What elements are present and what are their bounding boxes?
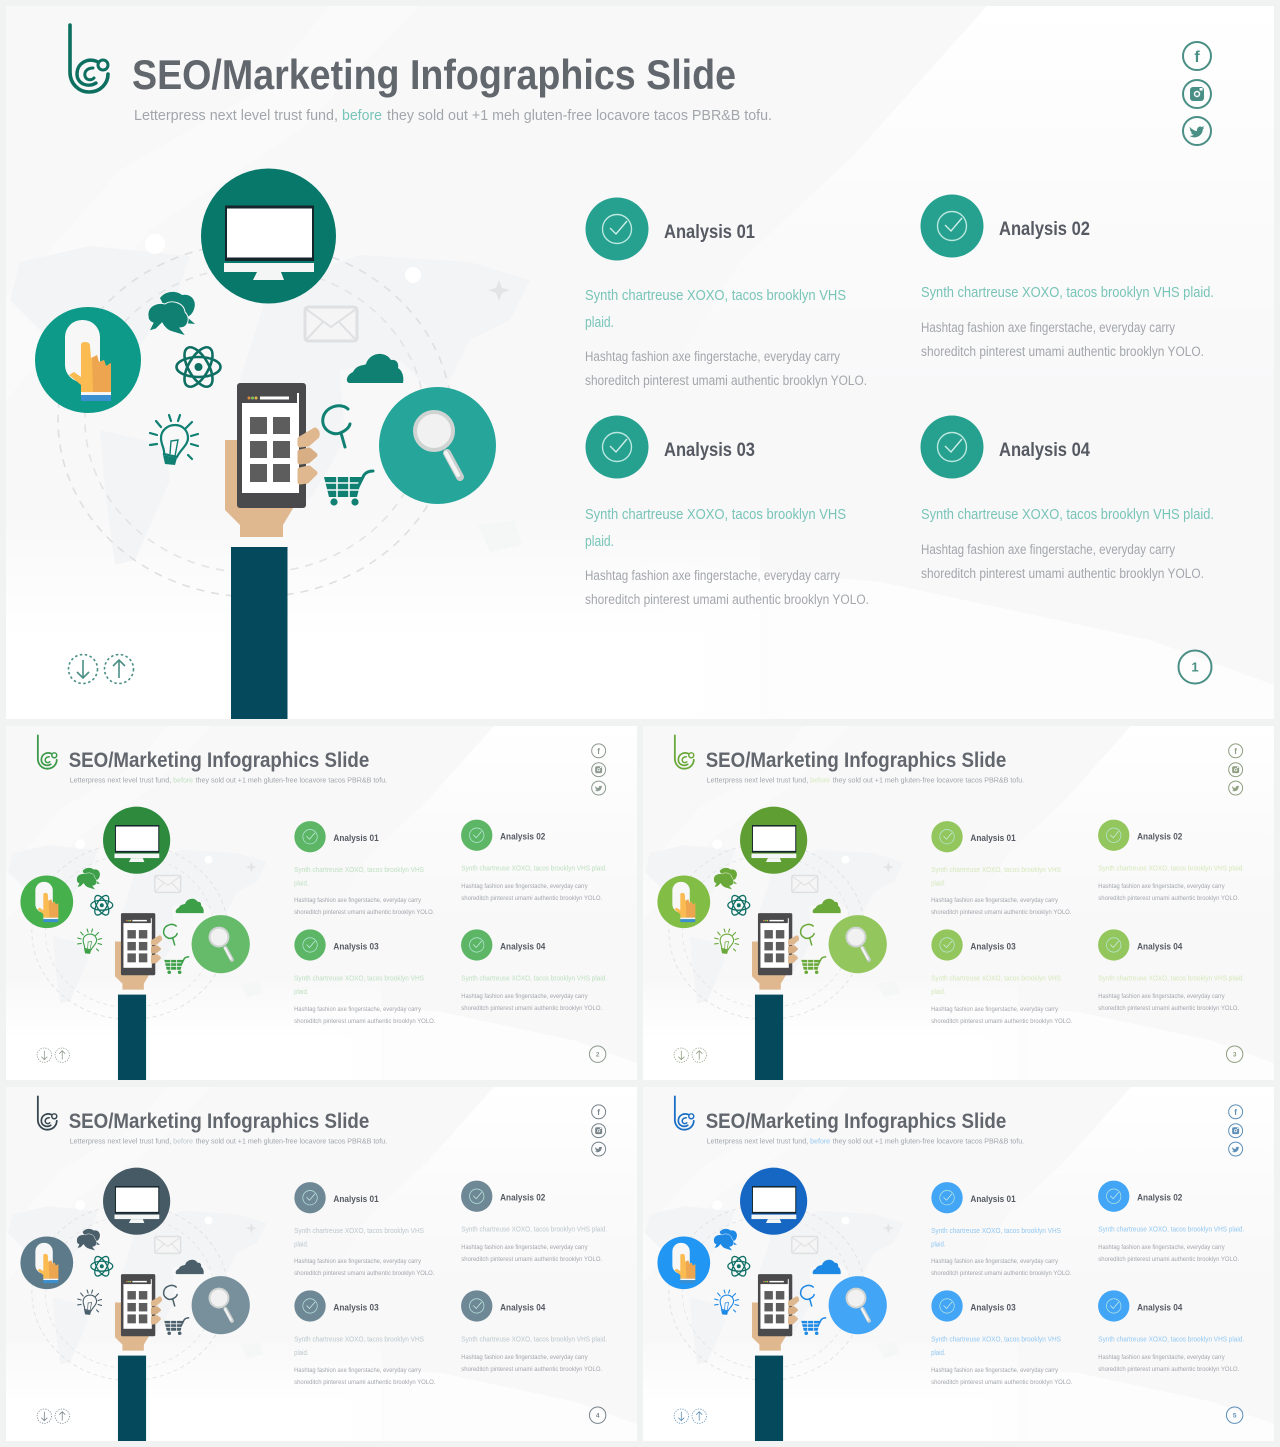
- block: Analysis 01: Hashtag fashion axe fingerstache, everyday carry: [585, 349, 840, 364]
- icon: light bulb: [78, 1290, 102, 1315]
- subtitle: [134, 107, 772, 124]
- icon: light bulb: [715, 1290, 739, 1315]
- title: SEO/Marketing Infographics Slide: [69, 749, 369, 772]
- page number: 3: [1233, 1051, 1237, 1058]
- block: Analysis 02: Analysis 02: [500, 1193, 545, 1204]
- block: Analysis 04: Synth chartreuse XOXO, tacos brooklyn VHS plaid.: [461, 1335, 607, 1344]
- illustration: phone: [121, 913, 155, 975]
- icon: monitor: [740, 807, 807, 874]
- block: Analysis 03: Hashtag fashion axe fingerstache, everyday carry: [931, 1367, 1059, 1374]
- block: Analysis 01: Analysis 01: [333, 1194, 379, 1205]
- icon: chat bubbles: [77, 868, 100, 890]
- block: Analysis 04: Analysis 04: [999, 440, 1090, 461]
- icon: small magnifier: [164, 924, 177, 945]
- icon: cloud: [813, 899, 841, 913]
- subtitle: they sold out +1 meh gluten-free locavore tacos PBR&B tofu.: [833, 776, 1024, 785]
- subtitle: they sold out +1 meh gluten-free locavore tacos PBR&B tofu.: [196, 1137, 387, 1146]
- block: Analysis 04: Hashtag fashion axe fingerstache, everyday carry: [461, 1354, 588, 1361]
- icon: light bulb: [150, 415, 198, 465]
- block: Analysis 02: shoreditch pinterest umami authentic brooklyn YOLO.: [1098, 895, 1239, 902]
- block: Analysis 04: Analysis 04: [1137, 1302, 1183, 1313]
- block: Analysis 03: Hashtag fashion axe fingerstache, everyday carry: [585, 568, 840, 583]
- block: Analysis 01: [931, 821, 1072, 916]
- illustration: hand and arm: [225, 440, 295, 719]
- subtitle: [70, 1137, 387, 1146]
- icon: atom: [176, 343, 220, 391]
- block: Analysis 04: Hashtag fashion axe fingerstache, everyday carry: [921, 542, 1175, 557]
- icon: chat bubbles: [714, 868, 737, 890]
- icon: touch hand: [657, 875, 710, 928]
- subtitle: Letterpress next level trust fund,: [70, 776, 171, 785]
- block: Analysis 01: [585, 198, 867, 388]
- arrow buttons: [674, 1409, 706, 1423]
- block: Analysis 03: Analysis 03: [333, 1302, 379, 1313]
- icon: magnifier circle: [829, 1276, 887, 1334]
- block: Analysis 01: Hashtag fashion axe fingerstache, everyday carry: [931, 897, 1059, 904]
- block: Analysis 04: Synth chartreuse XOXO, tacos brooklyn VHS plaid.: [921, 506, 1214, 523]
- block: Analysis 02: Analysis 02: [500, 832, 545, 843]
- icon: atom: [91, 1254, 113, 1278]
- title: SEO/Marketing Infographics Slide: [706, 1110, 1006, 1133]
- illustration: phone: [237, 383, 306, 508]
- icon: magnifier circle: [379, 387, 496, 504]
- illustration: hand and arm: [752, 1302, 787, 1441]
- block: Analysis 02: Analysis 02: [1137, 832, 1182, 843]
- block: Analysis 04: [920, 416, 1214, 581]
- block: Analysis 04: shoreditch pinterest umami authentic brooklyn YOLO.: [1098, 1005, 1239, 1012]
- block: Analysis 01: Analysis 01: [970, 1194, 1016, 1205]
- block: Analysis 01: Hashtag fashion axe fingerstache, everyday carry: [931, 1258, 1059, 1265]
- block: Analysis 02: Synth chartreuse XOXO, tacos brooklyn VHS plaid.: [1098, 1224, 1244, 1233]
- block: Analysis 03: plaid.: [931, 1348, 946, 1357]
- subtitle: Letterpress next level trust fund,: [70, 1137, 171, 1146]
- logo: [38, 1096, 57, 1130]
- subtitle: [707, 776, 1024, 785]
- block: Analysis 04: Analysis 04: [500, 1302, 546, 1313]
- icon: small magnifier: [323, 406, 350, 447]
- page number: 5: [1233, 1412, 1237, 1419]
- page number: [589, 1046, 606, 1062]
- slide background with world map: [643, 1087, 1274, 1441]
- illustration: fingers: [789, 1298, 798, 1323]
- slide background with world map: [6, 1087, 637, 1441]
- logo: [675, 1096, 694, 1130]
- block: Analysis 04: shoreditch pinterest umami authentic brooklyn YOLO.: [461, 1366, 602, 1373]
- panel: blue slide: [643, 1087, 1274, 1441]
- block: Analysis 02: shoreditch pinterest umami authentic brooklyn YOLO.: [1098, 1256, 1239, 1263]
- block: Analysis 03: plaid.: [294, 1348, 309, 1357]
- logo: [675, 735, 694, 769]
- block: Analysis 03: plaid.: [585, 533, 614, 550]
- icon: shopping cart: [801, 1318, 826, 1335]
- icon: envelope: [792, 1236, 818, 1253]
- block: Analysis 02: [1098, 1181, 1244, 1263]
- block: Analysis 03: [294, 929, 436, 1025]
- block: Analysis 03: shoreditch pinterest umami authentic brooklyn YOLO.: [294, 1379, 436, 1386]
- page number: [1226, 1407, 1243, 1423]
- block: Analysis 04: shoreditch pinterest umami authentic brooklyn YOLO.: [461, 1005, 602, 1012]
- title: SEO/Marketing Infographics Slide: [69, 1110, 369, 1133]
- icon: touch hand: [657, 1236, 710, 1289]
- icon: touch hand: [20, 1236, 73, 1289]
- icon: envelope: [305, 307, 357, 341]
- block: Analysis 01: Synth chartreuse XOXO, tacos brooklyn VHS: [931, 1226, 1061, 1235]
- social icons: f: [1234, 747, 1237, 756]
- icon: cloud: [176, 899, 204, 913]
- subtitle: before: [173, 776, 193, 785]
- illustration: fingers: [300, 430, 317, 482]
- block: Analysis 04: [461, 929, 607, 1012]
- block: Analysis 03: Hashtag fashion axe fingerstache, everyday carry: [294, 1006, 422, 1013]
- icon: light bulb: [78, 929, 102, 954]
- icon: light bulb: [715, 929, 739, 954]
- block: Analysis 02: Hashtag fashion axe fingerstache, everyday carry: [461, 1244, 588, 1251]
- illustration: fingers: [152, 937, 161, 962]
- icon: small magnifier: [801, 924, 814, 945]
- illustration: fingers: [152, 1298, 161, 1323]
- block: Analysis 03: Analysis 03: [664, 440, 755, 461]
- block: Analysis 03: shoreditch pinterest umami authentic brooklyn YOLO.: [294, 1018, 436, 1025]
- icon: shopping cart: [801, 957, 826, 974]
- icon: monitor: [103, 807, 170, 874]
- block: Analysis 01: Synth chartreuse XOXO, tacos brooklyn VHS: [931, 865, 1061, 874]
- arrow buttons: [37, 1409, 69, 1423]
- block: Analysis 04: Hashtag fashion axe fingerstache, everyday carry: [1098, 993, 1225, 1000]
- block: Analysis 03: Synth chartreuse XOXO, tacos brooklyn VHS: [294, 1335, 424, 1344]
- social icons: f: [597, 747, 600, 756]
- block: Analysis 01: [294, 821, 435, 916]
- block: Analysis 04: Analysis 04: [1137, 941, 1183, 952]
- block: Analysis 04: shoreditch pinterest umami authentic brooklyn YOLO.: [921, 566, 1204, 581]
- block: Analysis 04: Synth chartreuse XOXO, tacos brooklyn VHS plaid.: [1098, 974, 1244, 983]
- block: Analysis 03: shoreditch pinterest umami authentic brooklyn YOLO.: [931, 1379, 1073, 1386]
- icon: atom: [728, 893, 750, 917]
- page number: 2: [596, 1051, 600, 1058]
- block: Analysis 01: plaid.: [585, 314, 614, 331]
- block: Analysis 02: [461, 820, 607, 902]
- illustration: phone: [121, 1274, 155, 1336]
- block: Analysis 02: [461, 1181, 607, 1263]
- illustration: phone: [758, 913, 792, 975]
- block: Analysis 03: [294, 1290, 436, 1386]
- block: Analysis 02: Analysis 02: [999, 219, 1090, 240]
- panel: main teal slide: [6, 6, 1274, 719]
- subtitle: before: [810, 776, 830, 785]
- icon: atom: [91, 893, 113, 917]
- social icons: [592, 744, 606, 795]
- icon: magnifier circle: [192, 1276, 250, 1334]
- block: Analysis 04: Hashtag fashion axe fingerstache, everyday carry: [461, 993, 588, 1000]
- block: Analysis 02: Synth chartreuse XOXO, tacos brooklyn VHS plaid.: [461, 863, 607, 872]
- arrow buttons: [68, 654, 134, 684]
- icon: chat bubbles: [714, 1229, 737, 1251]
- logo: [70, 25, 108, 92]
- panel: light green slide: [643, 726, 1274, 1080]
- icon: monitor: [201, 168, 336, 304]
- icon: magnifier circle: [192, 915, 250, 973]
- subtitle: [70, 776, 387, 785]
- block: Analysis 03: plaid.: [931, 987, 946, 996]
- block: Analysis 03: Analysis 03: [970, 1302, 1016, 1313]
- block: Analysis 01: plaid.: [931, 878, 946, 887]
- block: Analysis 04: [1098, 1290, 1244, 1373]
- block: Analysis 03: Synth chartreuse XOXO, tacos brooklyn VHS: [585, 506, 846, 523]
- illustration: hand and arm: [115, 1302, 150, 1441]
- social icons: [1229, 1105, 1243, 1156]
- block: Analysis 03: shoreditch pinterest umami authentic brooklyn YOLO.: [585, 592, 869, 607]
- block: Analysis 01: Synth chartreuse XOXO, tacos brooklyn VHS: [585, 287, 846, 304]
- social icons: f: [1234, 1108, 1237, 1117]
- page number: 4: [596, 1412, 600, 1419]
- block: Analysis 03: Analysis 03: [333, 941, 379, 952]
- block: Analysis 01: plaid.: [294, 1239, 309, 1248]
- block: Analysis 01: Analysis 01: [970, 833, 1016, 844]
- subtitle: [707, 1137, 1024, 1146]
- block: Analysis 02: Hashtag fashion axe fingerstache, everyday carry: [921, 320, 1175, 335]
- icon: small magnifier: [801, 1285, 814, 1306]
- block: Analysis 04: Synth chartreuse XOXO, tacos brooklyn VHS plaid.: [461, 974, 607, 983]
- page number: 1: [1191, 660, 1199, 674]
- social icons: [592, 1105, 606, 1156]
- block: Analysis 03: [585, 416, 869, 607]
- arrow buttons: [37, 1048, 69, 1062]
- slide background with world map: [6, 726, 637, 1080]
- block: Analysis 04: shoreditch pinterest umami authentic brooklyn YOLO.: [1098, 1366, 1239, 1373]
- block: Analysis 02: shoreditch pinterest umami authentic brooklyn YOLO.: [461, 1256, 602, 1263]
- block: Analysis 02: Synth chartreuse XOXO, tacos brooklyn VHS plaid.: [921, 284, 1214, 301]
- icon: cloud: [347, 354, 403, 383]
- icon: touch hand: [20, 875, 73, 928]
- illustration: hand and arm: [115, 941, 150, 1080]
- illustration: hand and arm: [752, 941, 787, 1080]
- block: Analysis 02: shoreditch pinterest umami authentic brooklyn YOLO.: [461, 895, 602, 902]
- block: Analysis 03: [931, 929, 1073, 1025]
- subtitle: Letterpress next level trust fund,: [707, 1137, 808, 1146]
- block: Analysis 01: Analysis 01: [333, 833, 379, 844]
- icon: envelope: [155, 875, 181, 892]
- panel: slate grey slide: [6, 1087, 637, 1441]
- block: Analysis 03: Hashtag fashion axe fingerstache, everyday carry: [931, 1006, 1059, 1013]
- social icons: [1229, 744, 1243, 795]
- block: Analysis 03: shoreditch pinterest umami authentic brooklyn YOLO.: [931, 1018, 1073, 1025]
- block: Analysis 01: [931, 1182, 1072, 1277]
- block: Analysis 02: Hashtag fashion axe fingerstache, everyday carry: [1098, 883, 1225, 890]
- social icons: [1183, 42, 1211, 145]
- subtitle: before: [342, 107, 382, 124]
- block: Analysis 04: [1098, 929, 1244, 1012]
- block: Analysis 02: [1098, 820, 1244, 902]
- arrow buttons: [674, 1048, 706, 1062]
- block: Analysis 03: Hashtag fashion axe fingerstache, everyday carry: [294, 1367, 422, 1374]
- icon: envelope: [792, 875, 818, 892]
- block: Analysis 01: Synth chartreuse XOXO, tacos brooklyn VHS: [294, 1226, 424, 1235]
- block: Analysis 02: Hashtag fashion axe fingerstache, everyday carry: [461, 883, 588, 890]
- title: SEO/Marketing Infographics Slide: [132, 51, 736, 98]
- icon: chat bubbles: [77, 1229, 100, 1251]
- block: Analysis 02: Hashtag fashion axe fingerstache, everyday carry: [1098, 1244, 1225, 1251]
- block: Analysis 03: Analysis 03: [970, 941, 1016, 952]
- block: Analysis 02: [920, 194, 1214, 359]
- panel: green slide: [6, 726, 637, 1080]
- title: SEO/Marketing Infographics Slide: [706, 749, 1006, 772]
- page number: [1178, 650, 1212, 684]
- icon: touch hand: [35, 307, 141, 413]
- block: Analysis 03: Synth chartreuse XOXO, tacos brooklyn VHS: [931, 1335, 1061, 1344]
- block: Analysis 01: Analysis 01: [664, 222, 755, 243]
- subtitle: before: [810, 1137, 830, 1146]
- illustration: fingers: [789, 937, 798, 962]
- subtitle: they sold out +1 meh gluten-free locavore tacos PBR&B tofu.: [833, 1137, 1024, 1146]
- block: Analysis 03: plaid.: [294, 987, 309, 996]
- block: Analysis 04: Hashtag fashion axe fingerstache, everyday carry: [1098, 1354, 1225, 1361]
- block: Analysis 03: [931, 1290, 1073, 1386]
- subtitle: Letterpress next level trust fund,: [134, 107, 338, 124]
- block: Analysis 03: Synth chartreuse XOXO, tacos brooklyn VHS: [294, 974, 424, 983]
- illustration: phone: [758, 1274, 792, 1336]
- block: Analysis 01: Hashtag fashion axe fingerstache, everyday carry: [294, 1258, 422, 1265]
- social icons: f: [597, 1108, 600, 1117]
- page number: [589, 1407, 606, 1423]
- block: Analysis 02: Synth chartreuse XOXO, tacos brooklyn VHS plaid.: [461, 1224, 607, 1233]
- icon: shopping cart: [164, 957, 189, 974]
- icon: shopping cart: [164, 1318, 189, 1335]
- block: Analysis 01: shoreditch pinterest umami authentic brooklyn YOLO.: [585, 373, 867, 388]
- block: Analysis 01: Hashtag fashion axe fingerstache, everyday carry: [294, 897, 422, 904]
- icon: cloud: [813, 1260, 841, 1274]
- block: Analysis 01: shoreditch pinterest umami authentic brooklyn YOLO.: [931, 1270, 1072, 1277]
- icon: magnifier circle: [829, 915, 887, 973]
- block: Analysis 04: Analysis 04: [500, 941, 546, 952]
- block: Analysis 01: shoreditch pinterest umami authentic brooklyn YOLO.: [931, 909, 1072, 916]
- icon: monitor: [740, 1168, 807, 1235]
- logo: [38, 735, 57, 769]
- block: Analysis 02: shoreditch pinterest umami authentic brooklyn YOLO.: [921, 344, 1204, 359]
- block: Analysis 03: Synth chartreuse XOXO, tacos brooklyn VHS: [931, 974, 1061, 983]
- block: Analysis 01: [294, 1182, 435, 1277]
- icon: envelope: [155, 1236, 181, 1253]
- subtitle: before: [173, 1137, 193, 1146]
- page number: [1226, 1046, 1243, 1062]
- block: Analysis 02: Analysis 02: [1137, 1193, 1182, 1204]
- icon: atom: [728, 1254, 750, 1278]
- block: Analysis 02: Synth chartreuse XOXO, tacos brooklyn VHS plaid.: [1098, 863, 1244, 872]
- subtitle: Letterpress next level trust fund,: [707, 776, 808, 785]
- block: Analysis 01: shoreditch pinterest umami authentic brooklyn YOLO.: [294, 1270, 435, 1277]
- icon: chat bubbles: [148, 292, 195, 336]
- slide background with world map: [6, 6, 1274, 719]
- block: Analysis 04: Synth chartreuse XOXO, tacos brooklyn VHS plaid.: [1098, 1335, 1244, 1344]
- block: Analysis 01: Synth chartreuse XOXO, tacos brooklyn VHS: [294, 865, 424, 874]
- icon: shopping cart: [324, 471, 373, 506]
- block: Analysis 01: plaid.: [294, 878, 309, 887]
- icon: monitor: [103, 1168, 170, 1235]
- block: Analysis 01: plaid.: [931, 1239, 946, 1248]
- slide background with world map: [643, 726, 1274, 1080]
- block: Analysis 01: shoreditch pinterest umami authentic brooklyn YOLO.: [294, 909, 435, 916]
- subtitle: they sold out +1 meh gluten-free locavore tacos PBR&B tofu.: [387, 107, 772, 124]
- social icons: f: [1194, 49, 1200, 66]
- icon: small magnifier: [164, 1285, 177, 1306]
- block: Analysis 04: [461, 1290, 607, 1373]
- subtitle: they sold out +1 meh gluten-free locavore tacos PBR&B tofu.: [196, 776, 387, 785]
- icon: cloud: [176, 1260, 204, 1274]
